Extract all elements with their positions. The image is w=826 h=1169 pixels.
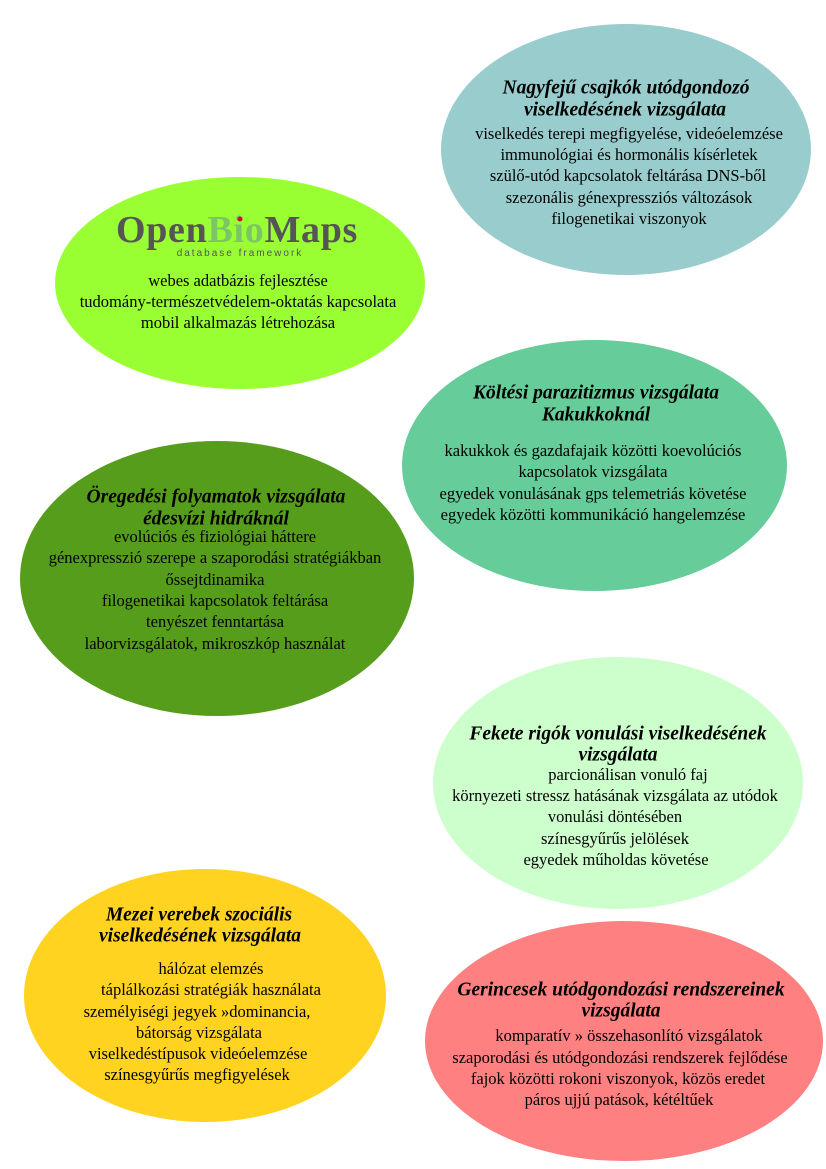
heading: Nagyfejű csajkók xyxy=(501,78,750,120)
text block: Öregedési folyamatok: őssejtdinamika xyxy=(166,570,265,589)
text block: Költési parazitizmus: egyedek vonulásának gps telemetriás követése xyxy=(440,484,746,503)
text block: csajkók: viselkedés terepi megfigyelése, videóelemzése xyxy=(475,124,783,143)
text block: Öregedési folyamatok: evolúciós és fiziológiai háttere xyxy=(114,527,316,546)
text block: Fekete rigók xyxy=(452,765,779,869)
text block: Gerincesek: szaporodási és utódgondozási rendszerek fejlődése xyxy=(452,1048,788,1067)
text block: OpenBioMaps: mobil alkalmazás létrehozása xyxy=(141,313,336,332)
heading: Mezei verebek: viselkedésének vizsgálata xyxy=(99,926,301,946)
text block: Mezei verebek: viselkedéstípusok videóelemzése xyxy=(89,1044,307,1063)
panel: Mezei verebek xyxy=(24,869,386,1122)
heading: Költési parazitizmus: Költési parazitizmus vizsgálata xyxy=(472,382,719,404)
text block: Öregedési folyamatok: tenyészet fenntartása xyxy=(146,612,285,631)
text block: Gerincesek: fajok közötti rokoni viszonyok, közös eredet xyxy=(471,1069,766,1088)
text block: Mezei verebek: színesgyűrűs megfigyelések xyxy=(104,1065,291,1084)
text block: Öregedési folyamatok: laborvizsgálatok, mikroszkóp használat xyxy=(85,634,346,653)
panel: Költési parazitizmus xyxy=(402,340,787,591)
text block: Költési parazitizmus: egyedek közötti kommunikáció hangelemzése xyxy=(441,505,745,524)
panel: OpenBioMaps xyxy=(55,177,425,389)
text block: Költési parazitizmus: kapcsolatok vizsgálata xyxy=(519,462,668,481)
text block: Gerincesek xyxy=(452,1026,788,1109)
text block: csajkók: szülő-utód kapcsolatok feltárása DNS-ből xyxy=(490,166,767,185)
text block: OpenBioMaps: tudomány-természetvédelem-oktatás kapcsolata xyxy=(80,292,397,311)
heading: Fekete rigók: vizsgálata xyxy=(578,744,658,766)
text block: OpenBioMaps: webes adatbázis fejlesztése xyxy=(148,271,328,290)
heading: Öregedési folyamatok: édesvízi hidráknál xyxy=(143,508,289,530)
heading: Öregedési folyamatok: Öregedési folyamatok vizsgálata xyxy=(87,486,346,508)
text block: csajkók: immunológiai és hormonális kísérletek xyxy=(500,145,758,164)
panel: Gerincesek xyxy=(425,921,823,1161)
text block: Fekete rigók: színesgyűrűs jelölések xyxy=(541,829,690,848)
panel: Fekete rigók xyxy=(433,657,803,909)
text block: Fekete rigók: egyedek műholdas követése xyxy=(523,850,709,869)
heading: Költési parazitizmus: Kakukkoknál xyxy=(541,404,651,426)
heading: Gerincesek xyxy=(457,980,785,1022)
text block: Fekete rigók: vonulási döntésében xyxy=(548,807,682,826)
panel: Öregedési folyamatok xyxy=(20,441,414,716)
text block: Mezei verebek: táplálkozási stratégiák használata xyxy=(101,980,322,999)
text block: Gerincesek: páros ujjú patások, kétéltűek xyxy=(525,1090,714,1109)
heading: Gerincesek: vizsgálata xyxy=(581,1000,661,1022)
text block: Mezei verebek: bátorság vizsgálata xyxy=(136,1023,263,1042)
text block: csajkók: szezonális génexpressziós változások xyxy=(506,188,753,207)
text block: csajkók: filogenetikai viszonyok xyxy=(551,209,707,228)
text block: Mezei verebek: személyiségi jegyek »dominancia, xyxy=(84,1002,310,1021)
heading: Költési parazitizmus xyxy=(472,382,719,426)
heading: Mezei verebek: Mezei verebek szociális xyxy=(105,904,292,926)
text block: Költési parazitizmus: kakukkok és gazdafajaik közötti koevolúciós xyxy=(445,441,741,460)
text block: Öregedési folyamatok xyxy=(49,527,381,653)
heading: Fekete rigók: Fekete rigók vonulási viselkedésének xyxy=(468,724,767,744)
logo: OpenBioMaps: OpenBioMaps xyxy=(116,209,358,251)
text block: Öregedési folyamatok: filogenetikai kapcsolatok feltárása xyxy=(102,591,329,610)
heading: Öregedési folyamatok xyxy=(87,486,346,530)
text block: Öregedési folyamatok: génexpresszió szerepe a szaporodási stratégiákban xyxy=(49,548,381,567)
text block: Mezei verebek: hálózat elemzés xyxy=(159,959,263,978)
text block: Költési parazitizmus xyxy=(440,441,746,524)
logo: OpenBioMaps: database framework xyxy=(177,248,303,259)
text block: Fekete rigók: parcionálisan vonuló faj xyxy=(548,765,708,784)
text block: Gerincesek: komparatív » összehasonlító vizsgálatok xyxy=(495,1026,763,1045)
text block: csajkók xyxy=(475,124,783,228)
panel: Nagyfejű csajkók xyxy=(441,24,811,275)
text block: Mezei verebek xyxy=(84,959,322,1084)
heading: Fekete rigók xyxy=(468,724,767,766)
text block: OpenBioMaps xyxy=(80,271,397,332)
text block: Fekete rigók: környezeti stressz hatásának vizsgálata az utódok xyxy=(452,786,779,805)
heading: Mezei verebek xyxy=(99,904,301,946)
heading: Nagyfejű csajkók: viselkedésének vizsgálata xyxy=(524,100,726,120)
heading: Nagyfejű csajkók: Nagyfejű csajkók utódgondozó xyxy=(501,78,750,98)
heading: Gerincesek: Gerincesek utódgondozási rendszereinek xyxy=(457,980,785,1000)
